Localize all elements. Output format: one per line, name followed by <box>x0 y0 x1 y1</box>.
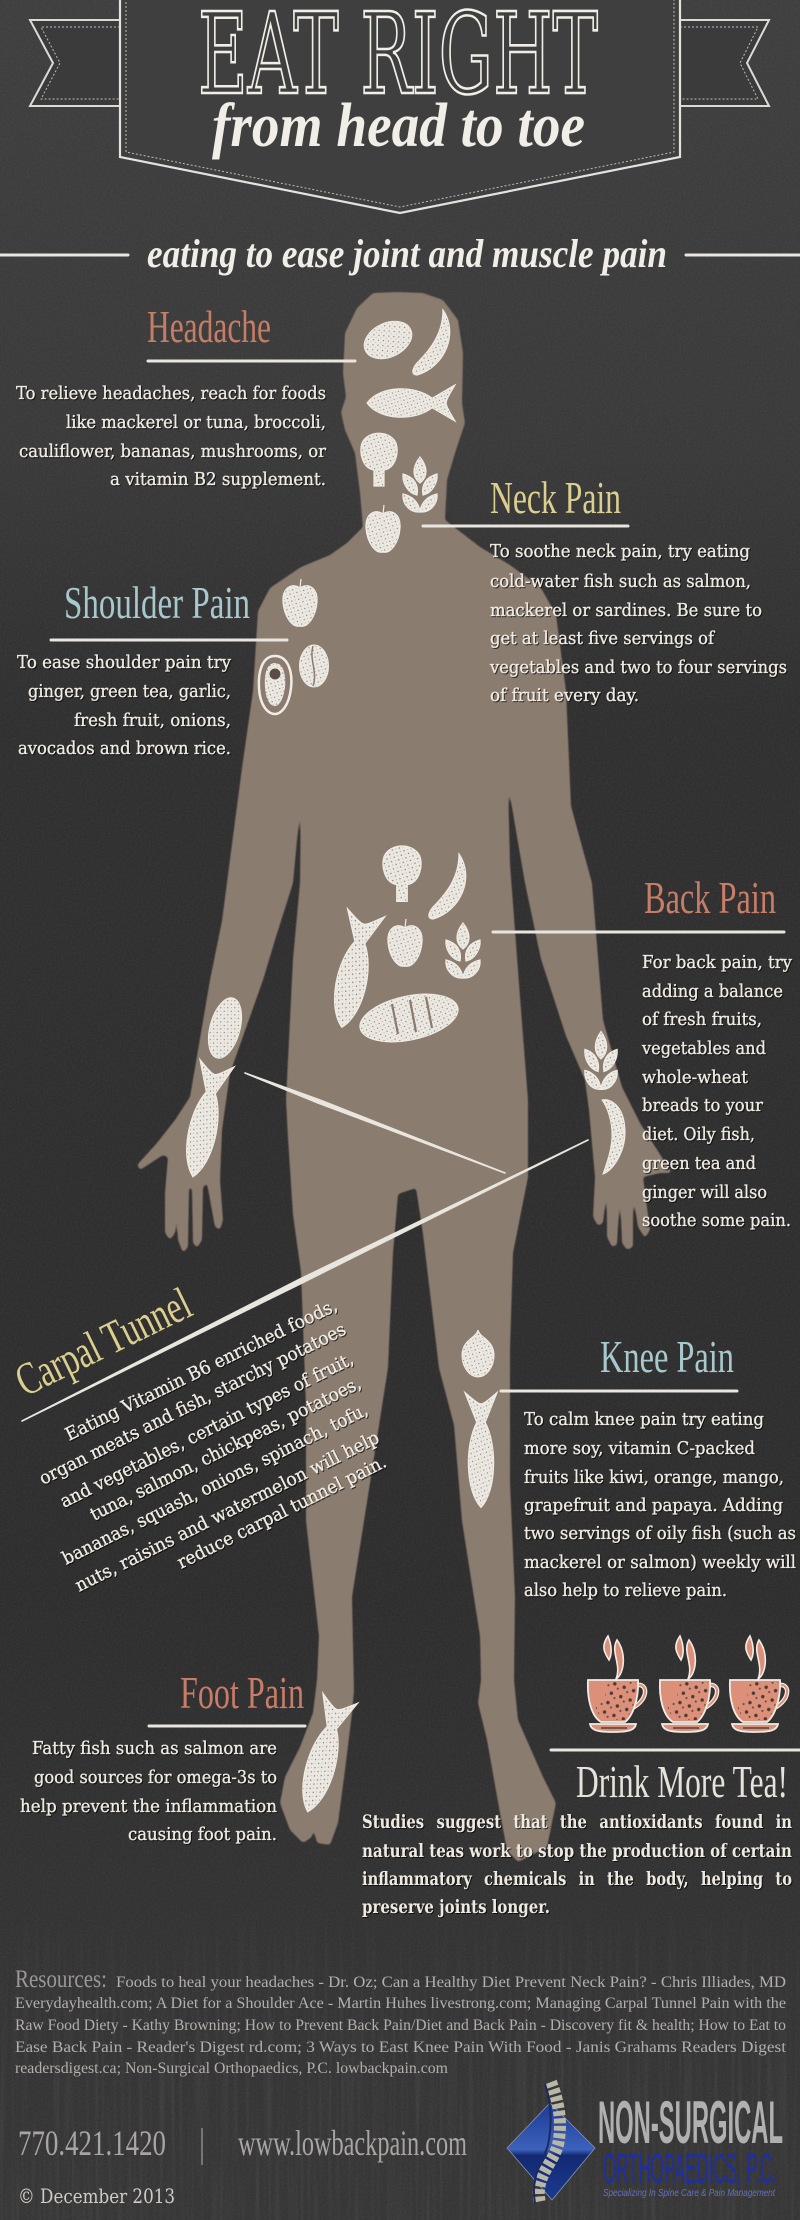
text: shoulder pain advice: fresh fruit, onions, <box>74 710 231 731</box>
text: back pain advice: adding a balance <box>642 981 783 1002</box>
panel: shoulder pain <box>17 577 287 759</box>
text: headache advice: a vitamin B2 supplement. <box>110 469 326 490</box>
text: knee pain advice: more soy, vitamin C-packed <box>524 1438 755 1459</box>
title: from head to toe: from head to toe <box>212 92 585 160</box>
icon: oval on forearm <box>202 994 248 1062</box>
text: back pain advice: breads to your <box>642 1095 763 1116</box>
text: back pain advice: of fresh fruits, <box>642 1009 762 1030</box>
text: knee pain advice: To calm knee pain try eating <box>524 1409 764 1430</box>
text: tea advice: preserve joints longer. <box>362 1897 550 1918</box>
text: foot pain advice: Fatty fish such as salmon are <box>32 1738 277 1759</box>
icon: bread loaf <box>356 986 462 1050</box>
text: carpal tunnel advice: and vegetables, certain types of fruit, <box>57 1349 357 1512</box>
icon: apple on torso <box>388 919 422 966</box>
text: neck pain advice: get at least five servings of <box>490 628 715 649</box>
icon: fish on face <box>367 385 455 421</box>
text: headache advice: like mackerel or tuna, broccoli, <box>66 412 326 433</box>
panel: carpal tunnel <box>7 1277 390 1596</box>
ribbon: left banner tail <box>30 20 120 106</box>
text: foot pain advice: help prevent the inflammation <box>20 1796 277 1817</box>
icon: ginger on jaw <box>403 457 437 512</box>
icon: broccoli on torso <box>383 846 421 901</box>
icon: walnut <box>300 645 328 687</box>
text: headache advice: cauliflower, bananas, mushrooms, or <box>19 441 326 462</box>
text: carpal tunnel advice <box>36 1295 390 1596</box>
text: foot pain advice <box>20 1738 277 1845</box>
heading: foot pain: Foot Pain <box>180 1667 304 1718</box>
contact: separator <box>201 2128 203 2165</box>
text: back pain advice: diet. Oily fish, <box>642 1124 755 1145</box>
contact: phone number: 770.421.1420 <box>18 2123 166 2163</box>
text: knee pain advice: also help to relieve pain. <box>524 1580 727 1601</box>
resources block: readersdigest.ca; Non-Surgical Orthopaedics, P.C. lowbackpain.com <box>15 2060 448 2077</box>
text: headache advice: To relieve headaches, reach for foods <box>16 383 326 404</box>
text: neck pain advice: of fruit every day. <box>490 685 639 706</box>
panel: knee pain <box>501 1331 796 1601</box>
text: carpal tunnel advice: bananas, squash, onions, spinach, tofu, <box>59 1399 372 1569</box>
icon: three tea cups <box>588 1636 787 1732</box>
ribbon: right banner tail <box>680 20 769 106</box>
text: back pain advice <box>641 952 793 1231</box>
text: neck pain advice: mackerel or sardines. Be sure to <box>490 600 762 621</box>
icon: apple on shoulder <box>283 579 317 626</box>
text: shoulder pain advice: ginger, green tea, garlic, <box>28 681 231 702</box>
heading: carpal tunnel: Carpal Tunnel <box>7 1277 199 1406</box>
heading: knee pain: Knee Pain <box>600 1331 734 1382</box>
logo: non-surgical orthopaedics <box>507 2082 783 2203</box>
icon: fish on foot <box>290 1693 358 1817</box>
resources block <box>15 1966 787 2077</box>
text: carpal tunnel advice: reduce carpal tunnel pain. <box>174 1452 390 1573</box>
text: back pain advice: green tea and <box>642 1153 756 1174</box>
text: shoulder pain advice <box>17 652 232 759</box>
text: carpal tunnel advice: tuna, salmon, chickpeas, potatoes, <box>87 1373 365 1525</box>
text: foot pain advice: good sources for omega-3s to <box>34 1767 277 1788</box>
icon: apple on neck <box>366 505 400 552</box>
icon: spine on blue diamond <box>507 2082 595 2203</box>
icon: avocado <box>259 656 291 714</box>
text: neck pain advice: To soothe neck pain, try eating <box>490 541 750 562</box>
icon: fish on torso <box>323 909 385 1031</box>
text: knee pain advice: grapefruit and papaya. Adding <box>524 1495 783 1516</box>
text: headache advice <box>16 383 326 490</box>
icon: onion on knee <box>462 1330 494 1377</box>
diagonal line: carpal tunnel pointer <box>22 1073 588 1421</box>
text: carpal tunnel advice: Eating Vitamin B6 enriched foods, <box>62 1295 341 1445</box>
icon: banana on head <box>413 310 450 375</box>
icon: ginger on torso <box>446 923 480 978</box>
resources block: Raw Food Diety - Kathy Browning; How to Prevent Back Pain/Diet and Back Pain - Discovery fit & health; How to Eat to <box>15 2017 786 2034</box>
heading: neck pain: Neck Pain <box>490 472 621 523</box>
icon: fish on shin <box>465 1392 497 1508</box>
text: knee pain advice <box>524 1409 796 1601</box>
panel: back pain <box>493 872 793 1231</box>
heading: resources: Resources: <box>15 1966 107 1993</box>
text: carpal tunnel advice: organ meats and fish, starchy potatoes <box>36 1319 350 1489</box>
icon: fish on left hand <box>176 1060 234 1180</box>
text: carpal tunnel advice: nuts, raisins and watermelon will help <box>72 1427 383 1596</box>
title banner <box>120 0 680 213</box>
icon: banana on torso <box>429 854 466 919</box>
text: shoulder pain advice: avocados and brown rice. <box>18 738 231 759</box>
resources block: Foods to heal your headaches - Dr. Oz; Can a Healthy Diet Prevent Neck Pain? - Chris Illiades, MD <box>116 1974 786 1991</box>
text: neck pain advice: cold-water fish such as salmon, <box>490 571 751 592</box>
panel: neck pain <box>423 472 787 706</box>
icon: broccoli on chin <box>361 433 397 486</box>
resources block: Everydayhealth.com; A Diet for a Shoulder Ace - Martin Huhes livestrong.com; Managing Carpal Tunnel Pain with the <box>15 1995 786 2012</box>
icon: banana on right hand <box>602 1100 625 1174</box>
icon: ginger on right forearm <box>585 1032 617 1089</box>
panel: drink more tea <box>362 1750 800 1918</box>
text: back pain advice: ginger will also <box>642 1182 767 1203</box>
panel: foot pain <box>20 1667 305 1845</box>
text: foot pain advice: causing foot pain. <box>128 1824 277 1845</box>
text: back pain advice: For back pain, try <box>642 952 793 973</box>
copyright: © December 2013 <box>18 2184 175 2208</box>
text: back pain advice: whole-wheat <box>642 1067 749 1088</box>
text: shoulder pain advice: To ease shoulder pain try <box>17 652 232 673</box>
text: tea advice <box>362 1812 792 1918</box>
heading: headache: Headache <box>147 301 271 352</box>
heading: shoulder pain: Shoulder Pain <box>64 577 250 628</box>
text: back pain advice: vegetables and <box>641 1038 766 1059</box>
text: neck pain advice <box>489 541 787 706</box>
panel: headache <box>16 301 355 490</box>
contact: website: www.lowbackpain.com <box>238 2123 467 2163</box>
icon: mushroom slice <box>358 314 418 366</box>
body silhouette <box>137 292 672 1862</box>
resources block: Ease Back Pain - Reader's Digest rd.com; 3 Ways to East Knee Pain With Food - Janis Grahams Readers Digest <box>15 2039 787 2056</box>
subtitle: eating to ease joint and muscle pain: eating to ease joint and muscle pain <box>147 231 667 276</box>
